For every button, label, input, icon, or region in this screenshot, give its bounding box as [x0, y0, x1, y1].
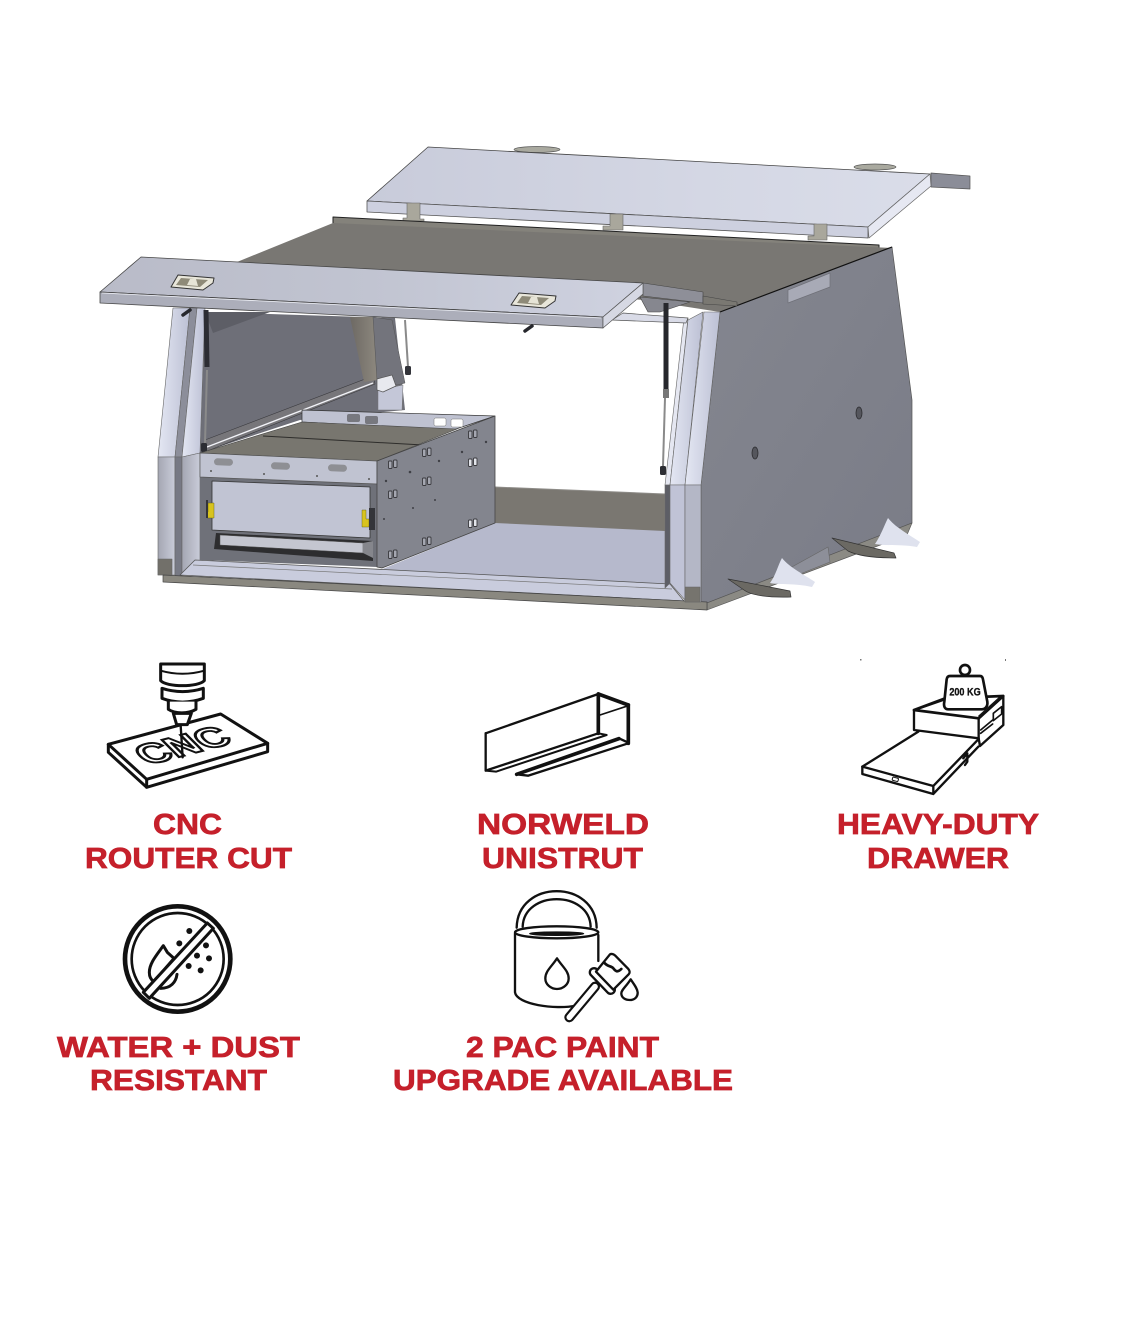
right pillar [665, 312, 720, 602]
drawer slide [214, 533, 373, 561]
base rail side [707, 523, 912, 610]
rear lid hinges [403, 203, 827, 240]
interior beam [205, 376, 375, 452]
front lid handle left [171, 275, 214, 290]
front sill [180, 560, 684, 601]
label: CNC router cut: CNC [153, 809, 222, 841]
label: heavy-duty drawer: HEAVY-DUTY [837, 809, 1039, 841]
canopy illustration [100, 146, 970, 610]
floor back wall [495, 487, 665, 532]
feature: water and dust resistant [57, 906, 300, 1097]
mounting foot front [728, 558, 815, 597]
label: Norweld unistrut: UNISTRUT [482, 843, 643, 875]
interior rear pillar [350, 317, 405, 410]
label: 2 pac paint upgrade: UPGRADE AVAILABLE [393, 1065, 733, 1097]
side upper bracket [788, 273, 830, 303]
label: water and dust resistant [57, 1032, 300, 1097]
feature: Norweld unistrut [477, 694, 649, 875]
brush handle [569, 987, 595, 1017]
drawer back plate [302, 410, 495, 430]
side lower bracket [780, 547, 830, 582]
label: Norweld unistrut: NORWELD [477, 809, 649, 841]
brush head [596, 954, 630, 990]
front strut [660, 303, 669, 475]
label: 2 pac paint upgrade [393, 1032, 733, 1097]
feature: 2 pac paint [393, 891, 733, 1097]
left pillar [158, 308, 205, 577]
drawer front rail [200, 453, 377, 484]
drawer face [212, 481, 370, 538]
rear strut [405, 320, 411, 375]
front lid handle right [511, 293, 556, 308]
drawer unit [200, 410, 495, 568]
icon: CNC router [108, 664, 268, 787]
rear lid [367, 147, 931, 238]
rear lid tab [931, 173, 970, 189]
lid pegs [183, 310, 532, 331]
drawer latches [207, 503, 369, 527]
label: water and dust resistant: RESISTANT [90, 1065, 267, 1097]
feature: CNC router cut [85, 664, 292, 875]
left strut [201, 310, 207, 452]
drawer cavity [200, 476, 377, 567]
icon: unistrut channel [486, 694, 628, 776]
mounting foot rear [832, 518, 920, 558]
label: water and dust resistant: WATER + DUST [57, 1032, 300, 1064]
weight [944, 665, 987, 709]
right side panel [701, 247, 912, 603]
speck marks [860, 659, 1006, 661]
label: heavy-duty drawer: DRAWER [867, 843, 1009, 875]
front header [612, 313, 688, 323]
label: 2 pac paint upgrade: 2 PAC PAINT [466, 1032, 659, 1064]
spindle [161, 664, 204, 757]
interior hinge [377, 375, 396, 392]
front lid hinge bracket [640, 283, 737, 312]
floor [380, 523, 665, 587]
icon: paint bucket and brush [515, 891, 638, 1017]
side bolts [752, 407, 862, 459]
rear header rail [333, 217, 879, 251]
rear lid handles [514, 146, 896, 170]
prohibition slash [143, 923, 213, 998]
weight: 200 KG [949, 687, 981, 699]
brush ferrule [594, 972, 611, 990]
icon: drawer with weight [862, 665, 1003, 794]
label: heavy-duty drawer [837, 809, 1039, 875]
label: Norweld unistrut [477, 809, 649, 875]
roof underside [237, 223, 892, 312]
drawer top [200, 422, 457, 461]
label: CNC router cut: ROUTER CUT [85, 843, 292, 875]
feature: heavy-duty drawer [837, 659, 1039, 875]
icon: no water or dust [125, 906, 230, 1012]
interior back wall [200, 312, 405, 453]
drawer side panel [377, 416, 495, 568]
front lid [100, 257, 643, 328]
CNC engraved lettering: CNC [125, 720, 240, 771]
label: CNC router cut [85, 809, 292, 875]
base strip [163, 575, 707, 610]
